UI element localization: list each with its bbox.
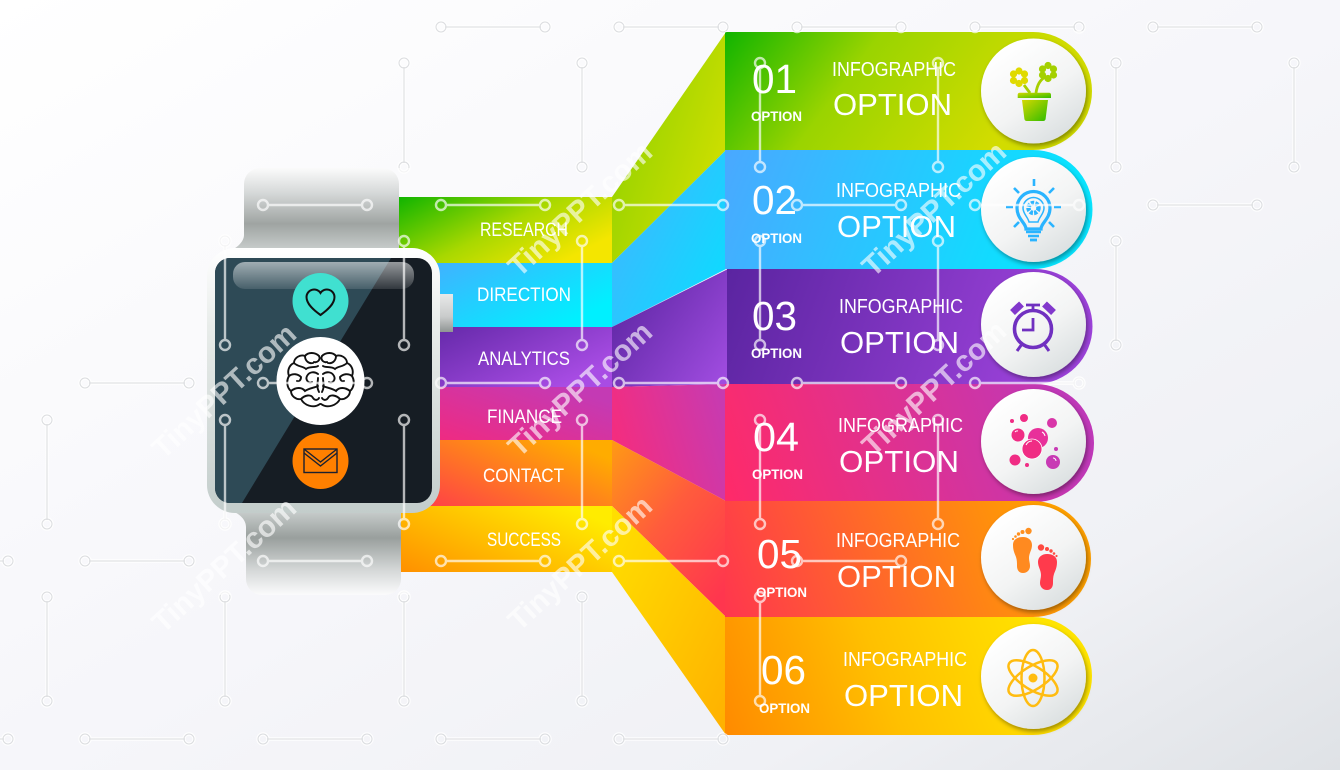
icon: mail (292, 433, 348, 489)
watch case (207, 248, 440, 513)
option 04 text: 04 (753, 414, 799, 460)
band labels: CONTACT (483, 466, 564, 487)
band labels: SUCCESS (487, 530, 561, 551)
icon: flower pot (1010, 62, 1057, 121)
option 05 text: INFOGRAPHIC (836, 530, 960, 552)
circuit overlay on coloured shapes (218, 31, 1085, 735)
option 04 text (752, 414, 963, 482)
option 04 text: OPTION (839, 444, 959, 479)
watermarks: TinyPPT.com (856, 135, 1013, 283)
band labels: FINANCE (487, 407, 562, 428)
band: finance (399, 387, 612, 440)
watermarks: TinyPPT.com (502, 315, 659, 463)
icon disc 01 (981, 38, 1086, 144)
band: contact (399, 440, 612, 506)
watch crown (438, 294, 453, 332)
ribbon 2 (612, 150, 726, 327)
watermarks: TinyPPT.com (856, 314, 1013, 462)
option 02 text (751, 177, 961, 246)
icon: heart (292, 273, 348, 329)
option 05 text: OPTION (837, 559, 956, 594)
icon: light bulb (1006, 179, 1061, 240)
icon disc 02 (981, 157, 1086, 262)
option 02 text: OPTION (837, 209, 956, 244)
option 02 text: OPTION (751, 230, 802, 246)
option 01 text: INFOGRAPHIC (832, 59, 956, 81)
ribbon 1 (612, 32, 726, 263)
option 03 text: OPTION (840, 325, 959, 360)
icon: atom (1003, 650, 1063, 706)
watermarks: TinyPPT.com (502, 489, 659, 637)
option 03 text (751, 293, 963, 361)
icon: brain (276, 337, 364, 425)
option 01 text: 01 (752, 56, 797, 102)
band: direction (399, 263, 612, 327)
icon disc 06 (981, 624, 1086, 729)
band: success (401, 506, 612, 572)
watch strap top (230, 168, 399, 250)
icon: footprints (1012, 528, 1058, 590)
icon disc 04 (981, 389, 1086, 494)
panel: option 04 (725, 384, 1094, 502)
watch screen (215, 258, 432, 503)
panel: option 05 (725, 501, 1091, 617)
icon disc 03 (981, 272, 1086, 377)
band labels: DIRECTION (477, 285, 571, 306)
watermarks: TinyPPT.com (146, 317, 303, 465)
icon: alarm clock (1012, 304, 1054, 351)
option 01 text: OPTION (751, 108, 802, 124)
ribbon 4 (612, 384, 726, 501)
option 02 text: INFOGRAPHIC (836, 180, 961, 202)
watermarks (146, 135, 1013, 639)
band labels (477, 220, 571, 551)
band labels: RESEARCH (480, 220, 568, 241)
option 04 text: OPTION (752, 466, 803, 482)
option 05 text: OPTION (756, 584, 807, 600)
band labels: ANALYTICS (478, 349, 570, 370)
watermarks: TinyPPT.com (146, 491, 303, 639)
watermarks: TinyPPT.com (502, 135, 659, 283)
left label bands (399, 197, 612, 572)
icon disc 05 (981, 505, 1086, 610)
band: research (399, 197, 612, 263)
icon: bubbles (1010, 414, 1060, 469)
option 05 text: 05 (757, 531, 802, 577)
panel text (751, 56, 967, 716)
ribbon 5 (612, 440, 726, 617)
option 06 text: INFOGRAPHIC (843, 649, 967, 671)
option 06 text (759, 647, 967, 716)
option 03 text: 03 (752, 293, 797, 339)
ribbon 6 (612, 506, 726, 735)
screen top bar (233, 262, 414, 289)
panel: option 01 (725, 32, 1092, 150)
option 04 text: INFOGRAPHIC (838, 415, 963, 437)
option 06 text: 06 (761, 647, 806, 693)
option 03 text: OPTION (751, 345, 802, 361)
panel: option 02 (725, 150, 1092, 269)
smart watch (207, 168, 453, 595)
option 03 text: INFOGRAPHIC (839, 296, 963, 318)
screen glare (215, 258, 391, 503)
option 05 text (756, 530, 960, 600)
connecting perspective ribbons (612, 32, 728, 735)
band: analytics (399, 327, 612, 387)
ribbon 3 (612, 269, 728, 387)
panel: option 03 (727, 269, 1092, 384)
option 02 text: 02 (752, 177, 797, 223)
option 06 text: OPTION (844, 678, 963, 713)
option 06 text: OPTION (759, 700, 810, 716)
option 01 text: OPTION (833, 87, 952, 122)
watch strap bottom (232, 511, 401, 595)
option 01 text (751, 56, 956, 124)
panel: option 06 (725, 617, 1092, 735)
